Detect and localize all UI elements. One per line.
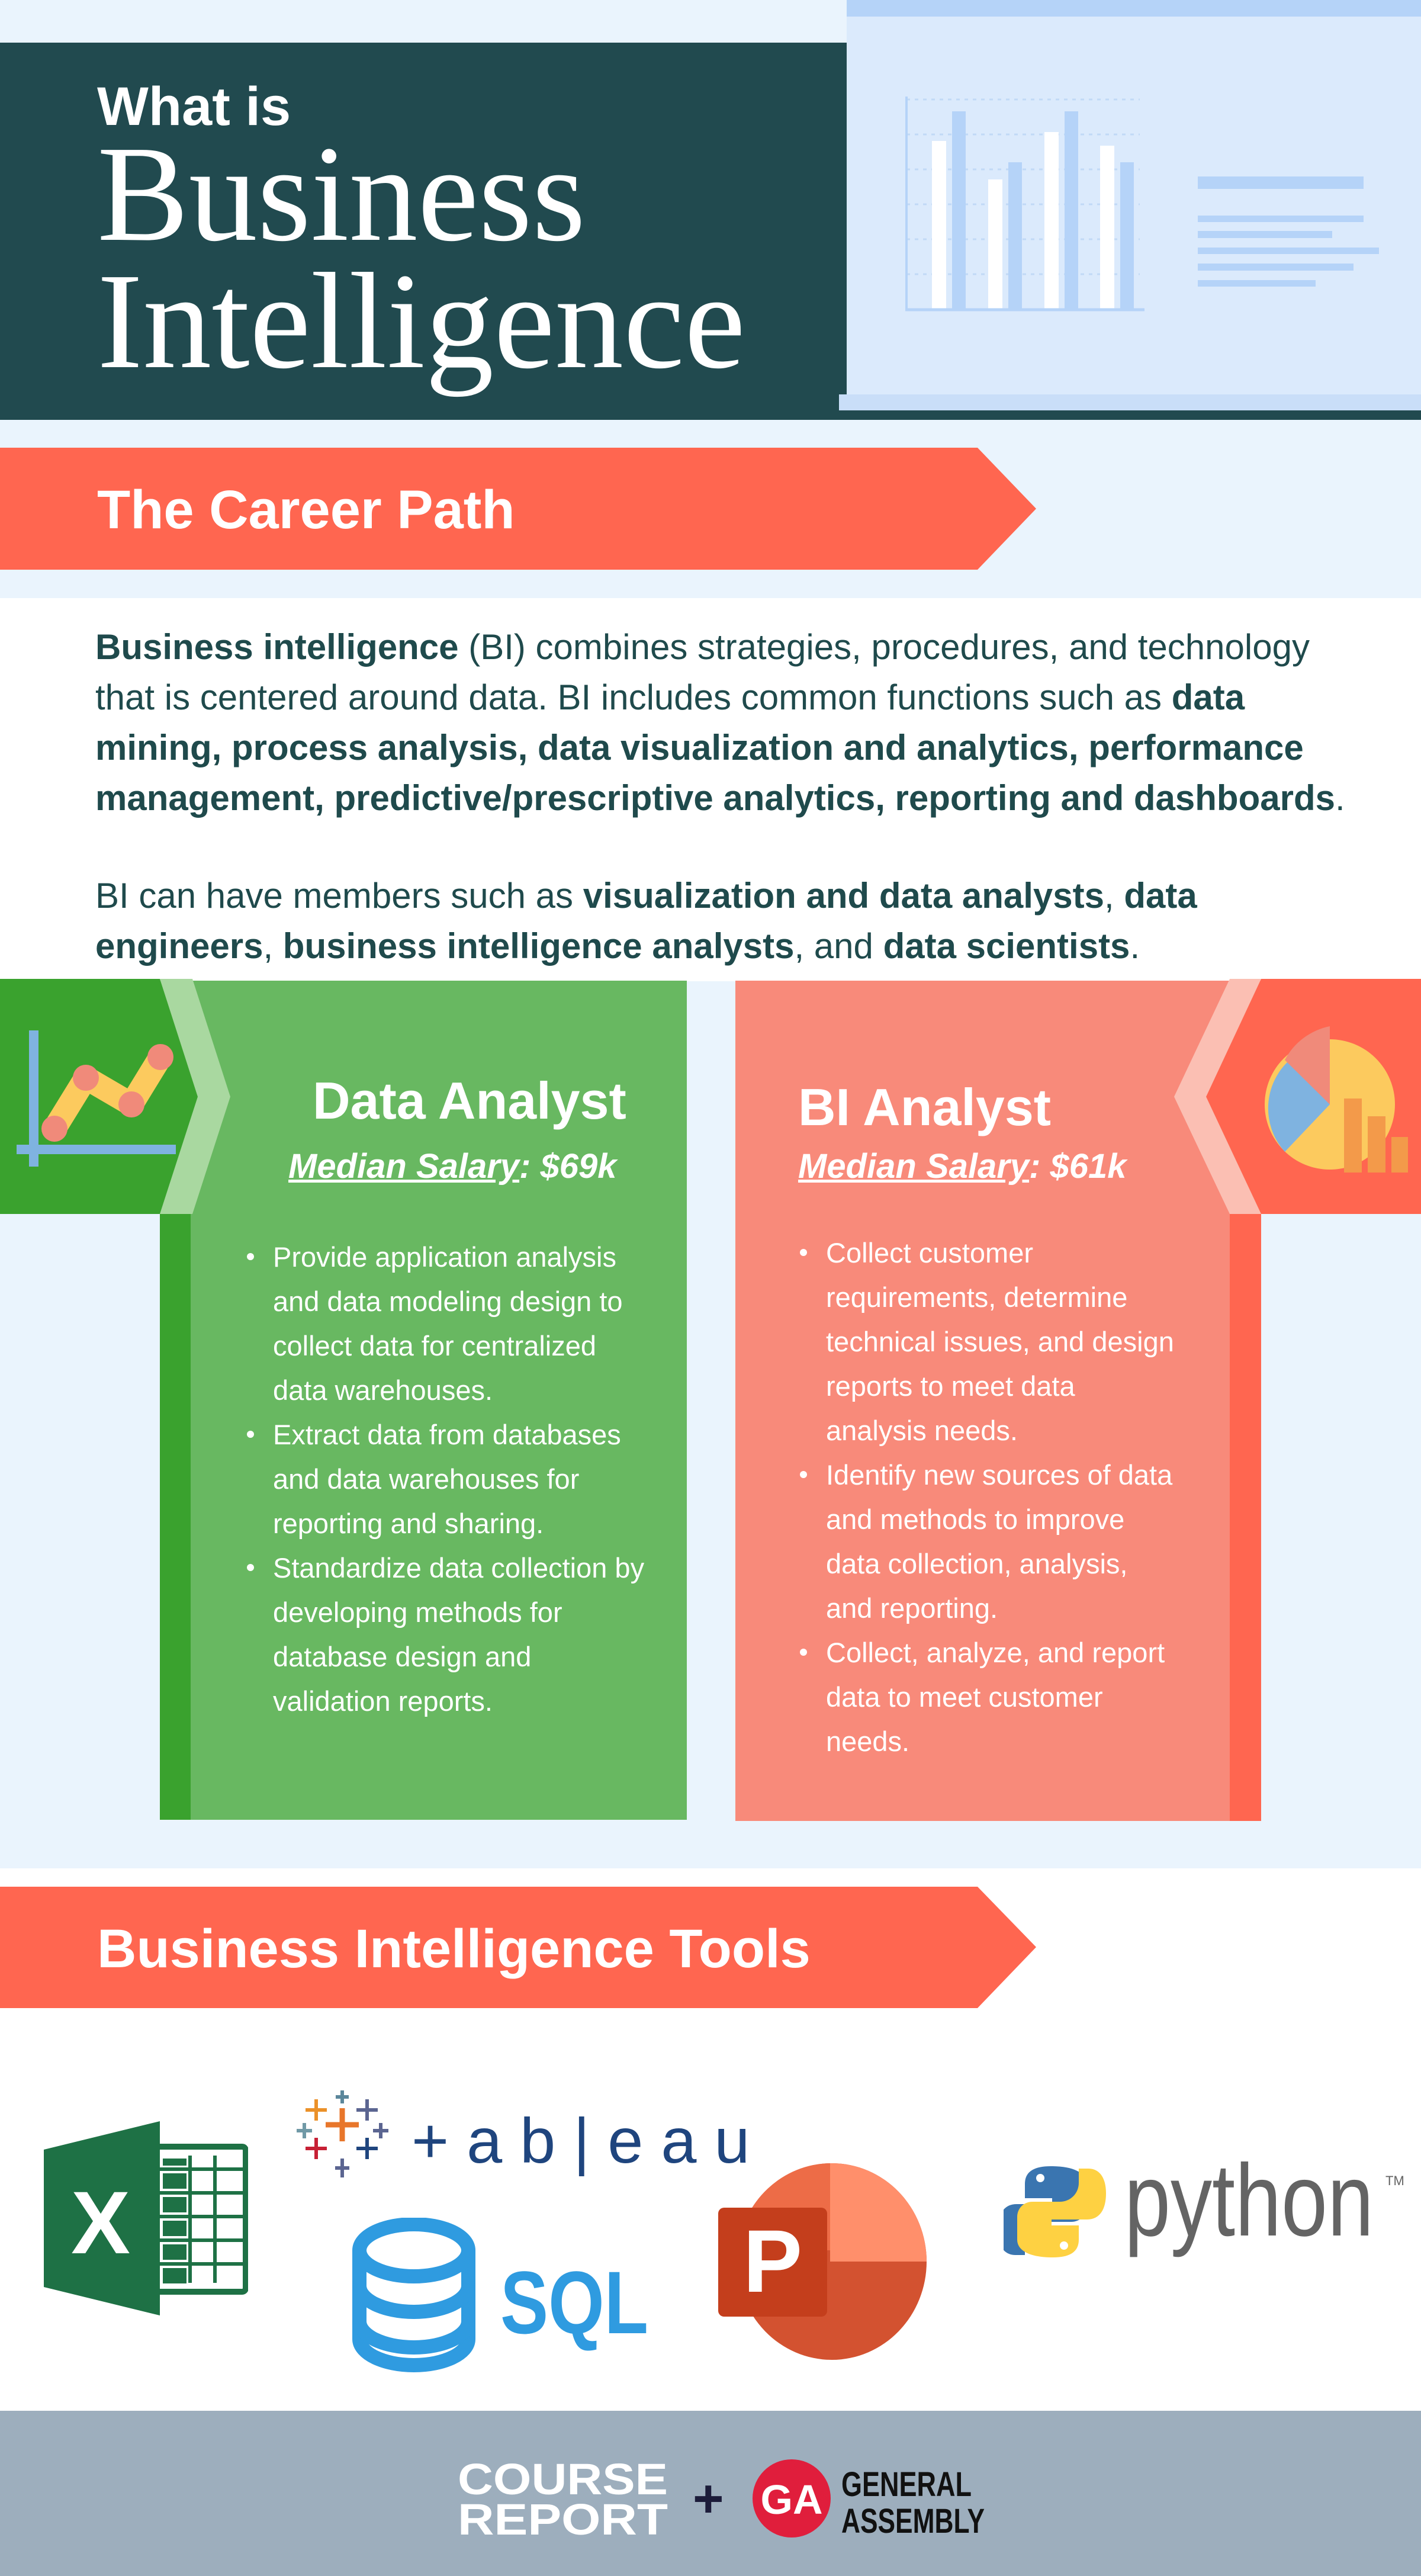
icon: Excel: X [71,2173,130,2272]
bullet list: and data modeling design to [273,1286,623,1317]
paragraph: members: engineers, business intelligence analysts, and data scientists. [95,926,1140,966]
paragraph: definition: Business intelligence (BI) combines strategies, procedures, and technology [95,627,1310,667]
title: BI Analyst: BI Analyst [798,1078,1051,1136]
heading banner: Business Intelligence Tools: Business Intelligence Tools [97,1919,811,1979]
paragraph: definition: mining, process analysis, data visualization and analytics, performance [95,728,1304,767]
icon: pie chart [1265,1026,1408,1173]
title text [97,76,745,397]
logo: Course Report + General Assembly [458,2458,985,2541]
bullet list: reports to meet data [826,1370,1075,1402]
heading banner: The Career Path: The Career Path [97,480,515,540]
paragraph: members [95,876,1197,966]
bullet list: validation reports. [273,1685,493,1717]
title text: Intelligence [97,245,745,397]
footer [0,2411,1421,2576]
bullet list: and reporting. [826,1592,998,1624]
bullet list: database design and [273,1641,531,1672]
bullet list [800,1237,1174,1757]
panel: BI Analyst [735,979,1421,1821]
logo: PowerPoint: P [743,2211,802,2311]
bullet list: and data warehouses for [273,1463,579,1495]
logo: tableau [297,2090,752,2177]
logo: Course Report + General Assembly: + [693,2469,724,2529]
bullet list: analysis needs. [826,1415,1018,1446]
bullet list: Collect, analyze, and report [826,1637,1165,1668]
bullet list: data warehouses. [273,1374,493,1406]
salary: Median Salary: $69k [288,1147,617,1186]
logo: Course Report + General Assembly: GA [760,2477,823,2523]
salary: Median Salary: $61k [798,1147,1127,1186]
icon: Excel [44,2121,248,2315]
bullet list: Identify new sources of data [826,1459,1172,1491]
bullet list [247,1241,644,1717]
bullet list: data collection, analysis, [826,1548,1127,1579]
panel: Data Analyst [0,979,687,1820]
paragraph: definition [95,627,1345,818]
logo: SQL [352,2218,648,2372]
logo: python [1004,2161,1404,2258]
bullet list: needs. [826,1726,909,1757]
bullet list: data to meet customer [826,1681,1103,1713]
bullet list: reporting and sharing. [273,1508,544,1539]
tools section background [0,1868,1421,2411]
bullet list: developing methods for [273,1597,562,1628]
icon: line chart [17,1030,176,1167]
title text: What is [97,76,291,137]
bullet list: and methods to improve [826,1504,1124,1535]
intro text panel [0,598,1421,981]
bullet list: Provide application analysis [273,1241,616,1273]
heading banner: The Career Path [0,448,1036,570]
logo: python: TM [1385,2173,1404,2188]
paragraph: definition: that is centered around data. BI includes common functions such as data [95,677,1245,717]
bullet list: technical issues, and design [826,1326,1174,1357]
title text: Business [97,118,586,270]
illustration: dashboard chart [839,0,1421,410]
logo: PowerPoint [718,2163,927,2360]
bullet list: Extract data from databases [273,1419,621,1450]
title: Data Analyst: Data Analyst [313,1071,626,1130]
header panel [0,0,1421,420]
paragraph: members: BI can have members such as visualization and data analysts, data [95,876,1197,916]
heading banner: Business Intelligence Tools [0,1887,1036,2008]
dark title box [0,43,1421,420]
paragraph: definition: management, predictive/prescriptive analytics, reporting and dashboards. [95,778,1345,818]
bullet list: Collect customer [826,1237,1033,1268]
bullet list: collect data for centralized [273,1330,596,1361]
bullet list: Standardize data collection by [273,1552,644,1583]
bullet list: requirements, determine [826,1281,1127,1313]
